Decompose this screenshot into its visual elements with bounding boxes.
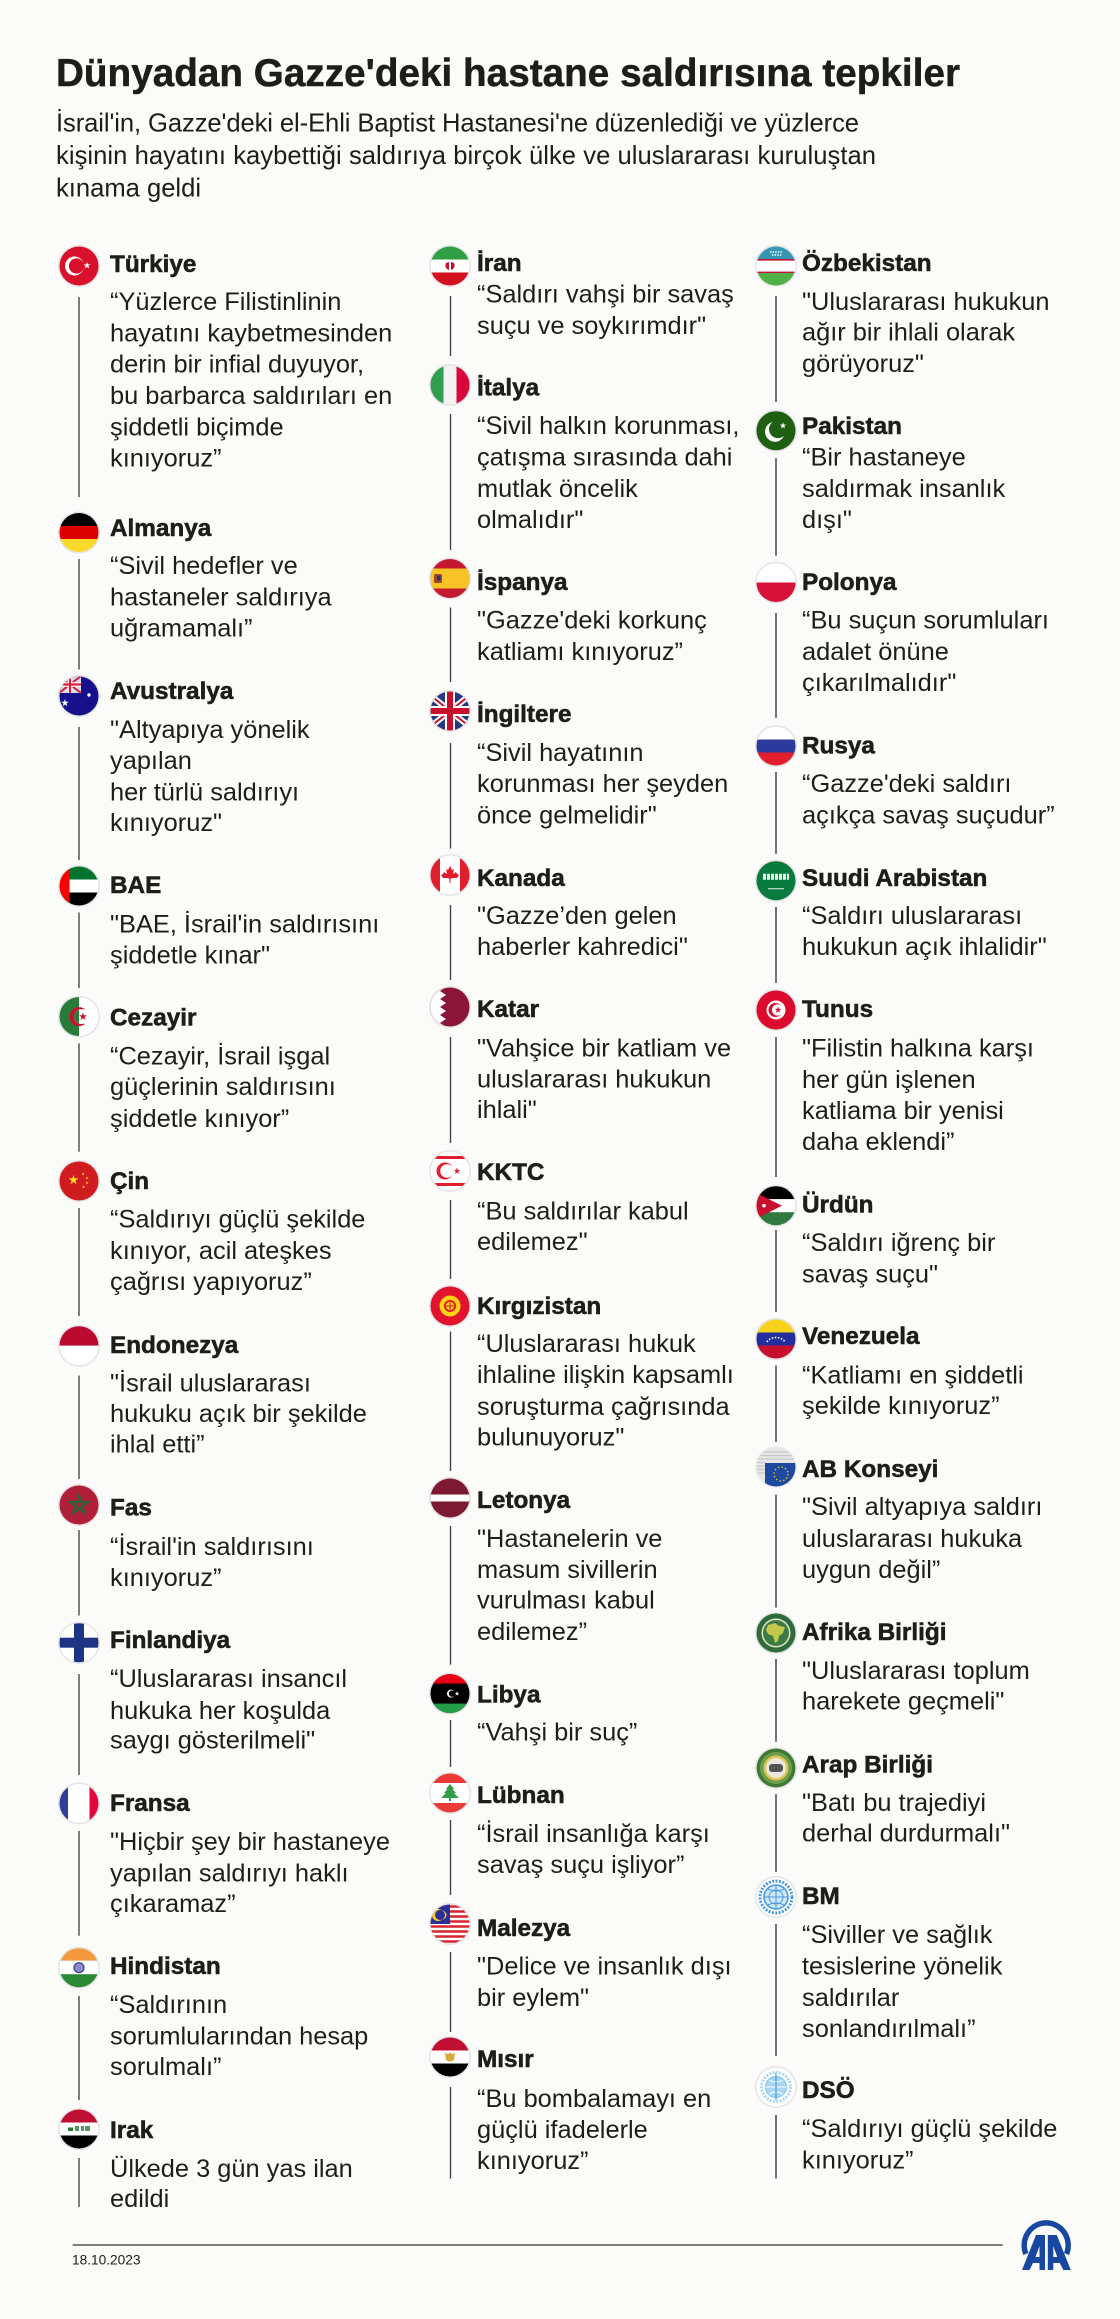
quote: Avustralya: yapılan — [110, 747, 192, 775]
flag: Avustralya — [58, 675, 100, 717]
quote: Endonezya: "İsrail uluslararası — [110, 1368, 311, 1397]
quote: Hindistan: “Saldırının — [110, 1991, 227, 2019]
quote: Türkiye: “Yüzlerce Filistinlinin — [110, 288, 341, 316]
quote: Katar: "Vahşice bir katliam ve — [477, 1035, 731, 1063]
flag: Letonya — [429, 1477, 471, 1519]
name: Endonezya: Endonezya — [110, 1332, 239, 1359]
quote: Endonezya: ihlal etti” — [110, 1431, 205, 1459]
item: Irak — [58, 2108, 353, 2213]
subtitle: kınama geldi — [56, 175, 201, 203]
flag: İran — [429, 245, 471, 287]
flag: Arap Birliği — [755, 1747, 797, 1789]
quote: Mısır: güçlü ifadelerle — [477, 2116, 648, 2144]
quote: Fransa: "Hiçbir şey bir hastaneye — [110, 1828, 390, 1856]
item: Fransa — [58, 1782, 390, 1936]
item: Libya — [429, 1673, 637, 1767]
flag: Lübnan — [429, 1772, 471, 1814]
name: KKTC: KKTC — [477, 1159, 544, 1186]
name: BM: BM — [802, 1883, 840, 1910]
name: Fransa: Fransa — [110, 1790, 190, 1817]
quote: DSÖ: “Saldırıyı güçlü şekilde — [802, 2115, 1057, 2143]
item: Afrika Birliği — [755, 1612, 1030, 1742]
name: Rusya: Rusya — [802, 732, 875, 760]
flag: Mısır — [429, 2036, 471, 2078]
name: İran: İran — [477, 250, 522, 277]
quote: Hindistan: sorulmalı” — [110, 2053, 221, 2081]
name: Kırgızistan: Kırgızistan — [477, 1293, 601, 1320]
quote: İspanya: katliamı kınıyoruz” — [477, 638, 683, 666]
name: Suudi Arabistan: Suudi Arabistan — [802, 865, 987, 892]
item: İran — [429, 245, 734, 356]
flag: Tunus — [755, 989, 797, 1031]
quote: Pakistan: saldırmak insanlık — [802, 475, 1006, 503]
quote: Katar: uluslararası hukukun — [477, 1066, 711, 1094]
flag: Katar — [429, 986, 471, 1028]
quote: AB Konseyi: uluslararası hukuka — [802, 1525, 1023, 1553]
quote: Mısır: kınıyoruz” — [477, 2147, 588, 2175]
flag: İspanya — [429, 558, 471, 600]
item: BAE — [58, 865, 379, 988]
quote: Almanya: hastaneler saldırıya — [110, 583, 332, 611]
quote: Venezuela: şekilde kınıyoruz” — [802, 1392, 1000, 1420]
item: AB Konseyi — [755, 1446, 1042, 1608]
quote: Çin: çağrısı yapıyoruz” — [110, 1268, 312, 1296]
name: Avustralya: Avustralya — [110, 678, 234, 705]
flag: Endonezya — [58, 1325, 100, 1367]
quote: Letonya: vurulması kabul — [477, 1586, 655, 1614]
flag: Suudi Arabistan — [755, 860, 797, 902]
quote: Pakistan: dışı" — [802, 506, 852, 534]
item: Polonya — [755, 562, 1049, 718]
item: Özbekistan — [755, 245, 1050, 402]
item: Avustralya — [58, 675, 310, 860]
flag: Libya — [429, 1673, 471, 1715]
name: Malezya: Malezya — [477, 1915, 571, 1942]
quote: Avustralya: "Altyapıya yönelik — [110, 716, 310, 744]
logo: AA — [1022, 2223, 1071, 2270]
flag: İngiltere — [429, 690, 471, 732]
quote: Özbekistan: görüyoruz" — [802, 350, 924, 378]
quote: İran: “Saldırı vahşi bir savaş — [477, 281, 734, 309]
name: Kanada: Kanada — [477, 865, 565, 892]
item: KKTC — [429, 1150, 689, 1279]
quote: Afrika Birliği: "Uluslararası toplum — [802, 1657, 1030, 1685]
name: İtalya: İtalya — [477, 374, 540, 402]
quote: Suudi Arabistan: “Saldırı uluslararası — [802, 902, 1022, 930]
quote: Cezayir: şiddetle kınıyor” — [110, 1105, 289, 1133]
name: Venezuela: Venezuela — [802, 1323, 920, 1350]
name: DSÖ: DSÖ — [802, 2077, 855, 2104]
quote: Tunus: daha eklendi” — [802, 1128, 954, 1156]
quote: Pakistan: “Bir hastaneye — [802, 444, 966, 472]
item: Rusya — [755, 725, 1055, 854]
name: Afrika Birliği: Afrika Birliği — [802, 1619, 946, 1646]
item: Ürdün — [755, 1185, 996, 1312]
flag: Venezuela — [755, 1318, 797, 1360]
quote: Malezya: bir eylem" — [477, 1984, 589, 2012]
title: Dünyadan Gazze'deki hastane saldırısına tepkiler — [56, 52, 960, 95]
item: İspanya — [429, 558, 707, 682]
subtitle: kişinin hayatını kaybettiği saldırıya birçok ülke ve uluslararası kuruluştan — [56, 142, 876, 170]
name: İngiltere: İngiltere — [477, 701, 572, 728]
quote: BM: sonlandırılmalı” — [802, 2015, 976, 2043]
quote: Fas: kınıyoruz” — [110, 1564, 221, 1592]
item: Venezuela — [755, 1318, 1024, 1442]
quote: İtalya: olmalıdır" — [477, 506, 583, 534]
quote: Malezya: "Delice ve insanlık dışı — [477, 1952, 732, 1980]
item: Arap Birliği — [755, 1747, 1010, 1872]
quote: İngiltere: önce gelmelidir" — [477, 802, 657, 830]
quote: Mısır: “Bu bombalamayı en — [477, 2085, 711, 2113]
flag: Fas — [58, 1484, 100, 1526]
flag: DSÖ — [755, 2066, 797, 2108]
name: Finlandiya: Finlandiya — [110, 1627, 231, 1654]
flag: Cezayir — [58, 996, 100, 1038]
quote: Cezayir: güçlerinin saldırısını — [110, 1073, 336, 1101]
quote: Kırgızistan: ihlaline ilişkin kapsamlı — [477, 1361, 734, 1389]
quote: Fransa: çıkaramaz” — [110, 1890, 236, 1918]
item: Kanada — [429, 854, 688, 980]
name: Ürdün: Ürdün — [802, 1192, 874, 1218]
flag: Kırgızistan — [429, 1285, 471, 1327]
name: Tunus: Tunus — [802, 996, 873, 1023]
quote: Finlandiya: hukuka her koşulda — [110, 1697, 331, 1725]
name: Irak: Irak — [110, 2117, 154, 2144]
item: Lübnan — [429, 1772, 710, 1895]
quote: Türkiye: bu barbarca saldırıları en — [110, 382, 392, 410]
quote: Tunus: her gün işlenen — [802, 1066, 976, 1094]
quote: İngiltere: korunması her şeyden — [477, 770, 728, 798]
name: İspanya: İspanya — [477, 569, 568, 596]
name: Cezayir: Cezayir — [110, 1005, 197, 1032]
flag: Almanya — [58, 512, 100, 554]
quote: AB Konseyi: "Sivil altyapıya saldırı — [802, 1493, 1042, 1521]
quote: Kırgızistan: bulunuyoruz" — [477, 1424, 624, 1452]
flag: Malezya — [429, 1903, 471, 1945]
item: Çin — [58, 1160, 365, 1316]
name: Pakistan: Pakistan — [802, 413, 902, 440]
quote: Ürdün: “Saldırı iğrenç bir — [802, 1229, 996, 1257]
quote: Hindistan: sorumlularından hesap — [110, 2023, 368, 2051]
item: Türkiye — [58, 245, 392, 497]
quote: Türkiye: kınıyoruz” — [110, 444, 221, 472]
item: Malezya — [429, 1903, 732, 2032]
quote: Türkiye: şiddetli biçimde — [110, 414, 284, 442]
quote: Libya: “Vahşi bir suç” — [477, 1718, 637, 1746]
quote: Fas: “İsrail'in saldırısını — [110, 1532, 314, 1561]
item: İngiltere — [429, 690, 728, 849]
name: Özbekistan: Özbekistan — [802, 250, 932, 277]
name: Almanya: Almanya — [110, 515, 212, 542]
quote: Letonya: "Hastanelerin ve — [477, 1525, 662, 1553]
quote: İtalya: mutlak öncelik — [477, 475, 638, 503]
flag: İtalya — [429, 364, 471, 406]
quote: Türkiye: derin bir infial duyuyor, — [110, 350, 364, 378]
item: Tunus — [755, 989, 1034, 1177]
quote: BAE: "BAE, İsrail'in saldırısını — [110, 910, 379, 939]
name: Libya: Libya — [477, 1682, 541, 1709]
item: Kırgızistan — [429, 1285, 734, 1471]
quote: BM: “Siviller ve sağlık — [802, 1921, 993, 1949]
name: Polonya: Polonya — [802, 569, 897, 596]
item: Katar — [429, 986, 731, 1143]
name: Türkiye: Türkiye — [110, 251, 196, 278]
flag: Afrika Birliği — [755, 1612, 797, 1654]
flag: Finlandiya — [58, 1622, 100, 1664]
quote: Suudi Arabistan: hukukun açık ihlalidir" — [802, 933, 1047, 961]
quote: Letonya: masum sivillerin — [477, 1556, 658, 1584]
flag: Irak — [58, 2108, 100, 2150]
name: Fas: Fas — [110, 1494, 152, 1521]
name: AB Konseyi: AB Konseyi — [802, 1456, 938, 1483]
quote: BM: tesislerine yönelik — [802, 1952, 1003, 1980]
item: İtalya — [429, 364, 739, 550]
quote: Avustralya: kınıyoruz" — [110, 809, 222, 837]
quote: İngiltere: “Sivil hayatının — [477, 739, 644, 767]
quote: Lübnan: savaş suçu işliyor” — [477, 1851, 684, 1879]
quote: Polonya: “Bu suçun sorumluları — [802, 606, 1049, 634]
flag: AB Konseyi — [755, 1446, 797, 1488]
quote: BM: saldırılar — [802, 1984, 900, 2012]
quote: İran: suçu ve soykırımdır" — [477, 312, 706, 340]
flag: Ürdün — [755, 1185, 797, 1227]
quote: Tunus: "Filistin halkına karşı — [802, 1035, 1034, 1063]
item: Hindistan — [58, 1947, 368, 2100]
flag: Pakistan — [755, 410, 797, 452]
quote: Finlandiya: saygı gösterilmeli" — [110, 1726, 315, 1754]
quote: Fransa: yapılan saldırıyı haklı — [110, 1860, 349, 1888]
quote: Irak: edildi — [110, 2185, 169, 2213]
flag: KKTC — [429, 1150, 471, 1192]
quote: Afrika Birliği: harekete geçmeli" — [802, 1688, 1004, 1716]
quote: Çin: “Saldırıyı güçlü şekilde — [110, 1206, 365, 1234]
quote: Polonya: adalet önüne — [802, 638, 949, 666]
flag: Polonya — [755, 562, 797, 604]
quote: AB Konseyi: uygun değil” — [802, 1556, 940, 1584]
flag: Hindistan — [58, 1947, 100, 1989]
name: BAE: BAE — [110, 872, 161, 899]
quote: KKTC: edilemez" — [477, 1228, 588, 1256]
quote: Kırgızistan: “Uluslararası hukuk — [477, 1330, 696, 1358]
quote: Lübnan: “İsrail insanlığa karşı — [477, 1819, 710, 1848]
flag: Özbekistan — [755, 245, 797, 287]
name: Hindistan: Hindistan — [110, 1953, 221, 1980]
quote: Özbekistan: ağır bir ihlali olarak — [802, 319, 1015, 347]
item: Almanya — [58, 512, 332, 670]
quote: Arap Birliği: derhal durdurmalı" — [802, 1820, 1010, 1848]
quote: DSÖ: kınıyoruz” — [802, 2146, 913, 2174]
flag: Kanada — [429, 854, 471, 896]
quote: Avustralya: her türlü saldırıyı — [110, 779, 299, 807]
item: Pakistan — [755, 410, 1006, 556]
item: Finlandiya — [58, 1622, 347, 1775]
quote: Venezuela: “Katliamı en şiddetli — [802, 1362, 1024, 1390]
name: Arap Birliği: Arap Birliği — [802, 1752, 933, 1779]
quote: KKTC: “Bu saldırılar kabul — [477, 1198, 689, 1226]
quote: Türkiye: hayatını kaybetmesinden — [110, 320, 392, 348]
quote: Irak: Ülkede 3 gün yas ilan — [110, 2155, 353, 2183]
item: Suudi Arabistan — [755, 860, 1047, 983]
quote: Almanya: uğramamalı” — [110, 614, 253, 642]
quote: Arap Birliği: "Batı bu trajediyi — [802, 1789, 986, 1817]
quote: Kanada: haberler kahredici" — [477, 933, 688, 961]
quote: İspanya: "Gazze'deki korkunç — [477, 606, 707, 634]
quote: Rusya: “Gazze'deki saldırı — [802, 770, 1011, 798]
date: 18.10.2023 — [72, 2252, 141, 2268]
quote: Ürdün: savaş suçu" — [802, 1261, 938, 1289]
item: BM — [755, 1876, 1003, 2056]
name: Letonya: Letonya — [477, 1487, 571, 1514]
item: Mısır — [429, 2036, 711, 2179]
flag: BAE — [58, 865, 100, 907]
item: Endonezya — [58, 1325, 367, 1479]
quote: Finlandiya: “Uluslararası insancıl — [110, 1665, 347, 1693]
quote: İtalya: “Sivil halkın korunması, — [477, 412, 739, 440]
quote: Katar: ihlali" — [477, 1096, 537, 1124]
name: Mısır: Mısır — [477, 2046, 534, 2073]
quote: Endonezya: hukuku açık bir şekilde — [110, 1400, 367, 1428]
item: Cezayir — [58, 996, 336, 1152]
name: Lübnan: Lübnan — [477, 1782, 565, 1809]
quote: Çin: kınıyor, acil ateşkes — [110, 1237, 332, 1265]
quote: Kanada: "Gazze’den gelen — [477, 902, 677, 930]
quote: Letonya: edilemez” — [477, 1618, 587, 1646]
item: DSÖ — [755, 2066, 1057, 2179]
quote: Rusya: açıkça savaş suçudur” — [802, 802, 1055, 830]
quote: İtalya: çatışma sırasında dahi — [477, 444, 732, 472]
subtitle: İsrail'in, Gazze'deki el-Ehli Baptist Hastanesi'ne düzenlediği ve yüzlerce — [56, 109, 859, 138]
quote: Almanya: “Sivil hedefler ve — [110, 552, 298, 580]
quote: Kırgızistan: soruşturma çağrısında — [477, 1393, 730, 1421]
name: Katar: Katar — [477, 996, 540, 1023]
quote: Polonya: çıkarılmalıdır" — [802, 669, 956, 697]
item: Letonya — [429, 1477, 662, 1665]
flag: Fransa — [58, 1782, 100, 1824]
quote: BAE: şiddetle kınar" — [110, 942, 270, 970]
name: Çin: Çin — [110, 1168, 149, 1195]
flag: Rusya — [755, 725, 797, 767]
quote: Özbekistan: "Uluslararası hukukun — [802, 288, 1050, 316]
flag: BM — [755, 1876, 797, 1918]
subtitle — [56, 109, 876, 203]
item: Fas — [58, 1484, 314, 1616]
quote: Tunus: katliama bir yenisi — [802, 1097, 1004, 1125]
flag: Türkiye — [58, 245, 100, 287]
quote: Cezayir: “Cezayir, İsrail işgal — [110, 1042, 330, 1071]
flag: Çin — [58, 1160, 100, 1202]
